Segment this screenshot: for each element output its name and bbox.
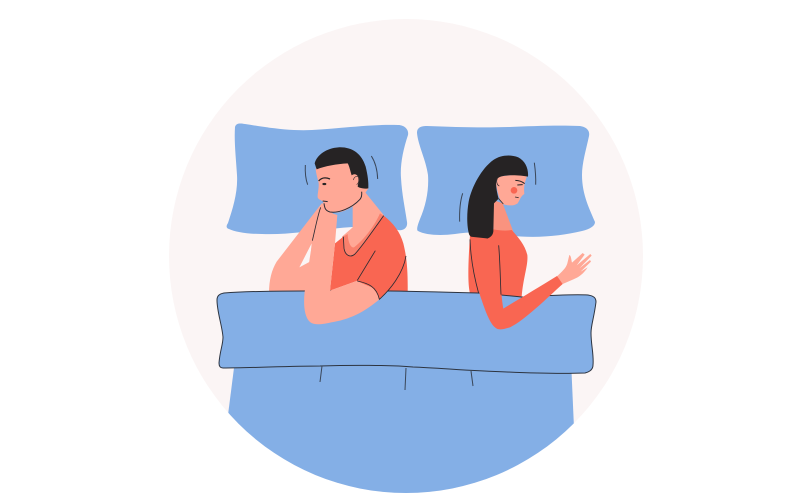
right pillow	[417, 126, 595, 237]
man: face lines	[323, 192, 362, 212]
woman, body behind blanket	[460, 155, 536, 297]
man: head	[316, 157, 368, 213]
man: arm and sleeve lines	[312, 207, 406, 299]
woman: hand	[557, 253, 592, 284]
woman: eyebrow and eye	[515, 180, 525, 185]
woman: neck	[493, 200, 513, 232]
man: sleeve	[357, 277, 388, 299]
woman: arm	[470, 237, 563, 329]
man: back arm	[269, 203, 337, 293]
sheet fold lines	[320, 366, 473, 390]
man: neck shadow	[343, 213, 384, 256]
woman: face	[496, 173, 528, 205]
man: hair	[315, 147, 368, 189]
man: pillow motion lines	[305, 156, 378, 185]
woman: shirt torso	[468, 229, 527, 297]
woman, front arm and hand	[470, 237, 592, 329]
man, front arm	[304, 205, 406, 324]
illustration: couple turned away from each other in bed	[169, 19, 643, 493]
woman: cheek	[511, 187, 517, 194]
blanket	[217, 291, 596, 373]
bed sheet	[228, 360, 574, 500]
background circle	[169, 19, 643, 493]
man: forearm	[304, 205, 379, 324]
man: ear	[353, 176, 359, 185]
left pillow	[227, 123, 408, 234]
woman: arm lines	[470, 239, 501, 295]
man: shirt	[330, 216, 408, 297]
man: neck	[342, 190, 385, 258]
woman: pillow motion lines	[460, 163, 536, 222]
man: eyebrow and eye	[319, 178, 330, 185]
woman: ear and jaw lines	[497, 179, 519, 204]
man, body behind blanket	[269, 147, 408, 297]
woman: hair	[467, 155, 528, 240]
